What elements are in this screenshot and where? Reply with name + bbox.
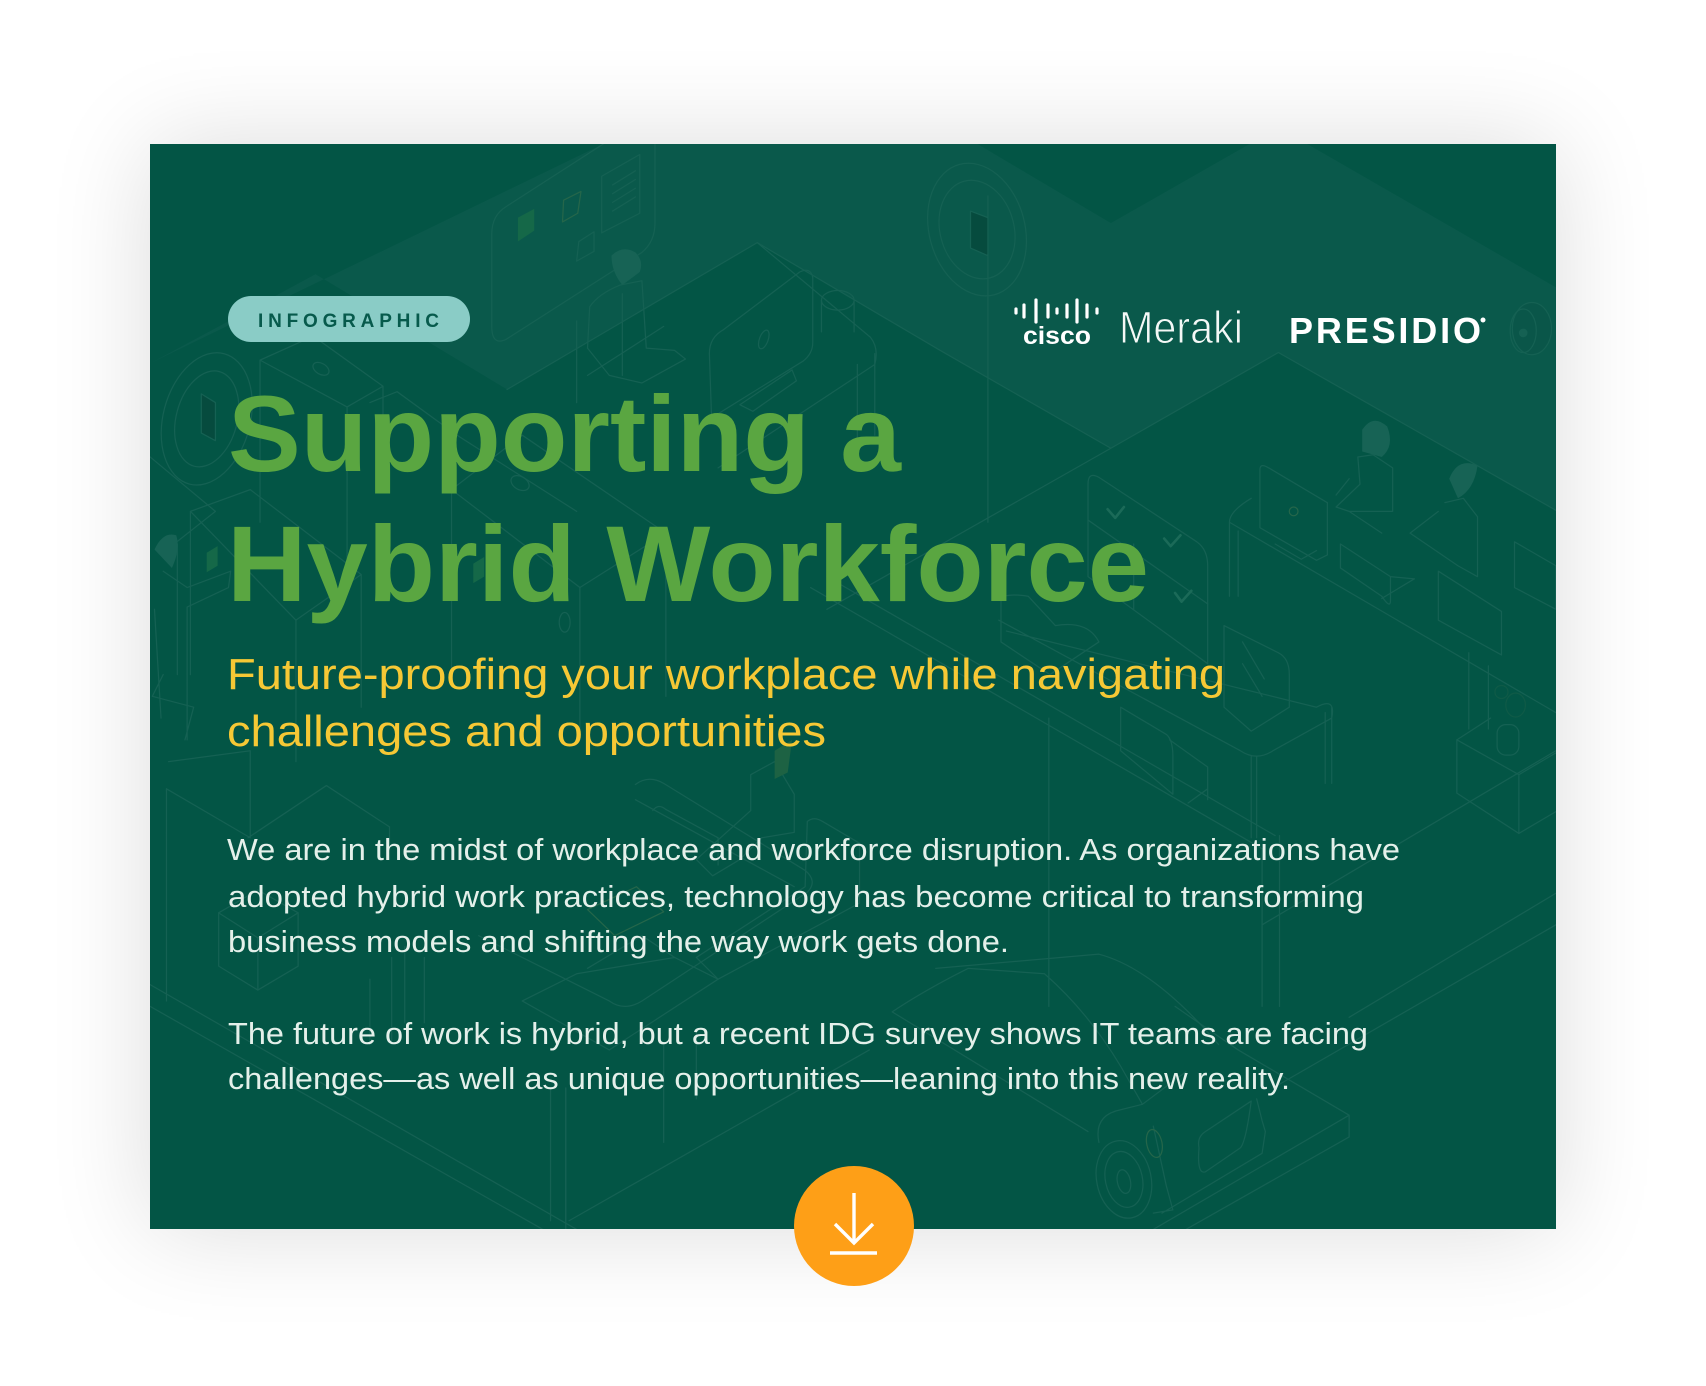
standing person at desk xyxy=(577,249,685,403)
infographic card xyxy=(150,144,1556,1286)
logo: Cisco Meraki: Meraki xyxy=(1119,302,1243,353)
left lower wall lines xyxy=(150,751,869,1229)
subtitle: Future-proofing your workplace while navigating xyxy=(227,650,1225,699)
subtitle xyxy=(227,650,1225,756)
body text paragraph 1: adopted hybrid work practices, technology has become critical to transforming xyxy=(228,879,1364,914)
floor lines right xyxy=(1262,751,1556,1088)
title xyxy=(227,373,1149,624)
left camera xyxy=(160,352,252,486)
body text paragraph 1: business models and shifting the way work gets done. xyxy=(228,924,1009,959)
body text paragraph 2 xyxy=(228,1016,1368,1096)
card shadow xyxy=(150,144,1556,1229)
download button xyxy=(794,1166,914,1286)
body text paragraph 2: challenges—as well as unique opportunities—leaning into this new reality. xyxy=(228,1061,1290,1096)
body text paragraph 2: The future of work is hybrid, but a recent IDG survey shows IT teams are facing xyxy=(228,1016,1368,1051)
icon: download arrow xyxy=(830,1193,877,1253)
plant and side cube xyxy=(1457,685,1556,833)
logo: Cisco Meraki: cisco xyxy=(1023,322,1091,350)
badge: infographic xyxy=(228,296,470,342)
left person xyxy=(152,534,231,740)
left cabinets xyxy=(150,336,666,762)
centre bottom table with people xyxy=(370,740,860,1229)
body text paragraph 1 xyxy=(227,832,1400,959)
badge: infographic: INFOGRAPHIC xyxy=(258,311,439,332)
title: Supporting a xyxy=(228,373,902,494)
background illustration: isometric office xyxy=(147,144,1556,1229)
title: Hybrid Workforce xyxy=(227,503,1149,624)
icon: cisco bars xyxy=(1016,300,1097,322)
long wall partition xyxy=(811,577,1279,1006)
right desk with monitors and two people xyxy=(1229,421,1556,729)
body text paragraph 1: We are in the midst of workplace and workforce disruption. As organizations have xyxy=(227,832,1400,867)
desk with monitor xyxy=(709,243,876,468)
panel: green background xyxy=(150,144,1556,1229)
car on platform xyxy=(892,954,1349,1229)
whiteboard with notes xyxy=(492,144,655,341)
wall edge lines xyxy=(507,196,1556,609)
top camera xyxy=(927,163,1027,296)
logo: Presidio: PRESIDIO xyxy=(1289,310,1481,351)
left lower cube xyxy=(219,890,298,990)
logo: Cisco Meraki xyxy=(1016,300,1243,353)
centre desk with laptop xyxy=(999,595,1333,838)
subtitle: challenges and opportunities xyxy=(227,707,826,756)
lighter wall region xyxy=(150,144,1556,510)
right camera xyxy=(1510,302,1552,355)
shelf with check marks xyxy=(1088,475,1208,664)
